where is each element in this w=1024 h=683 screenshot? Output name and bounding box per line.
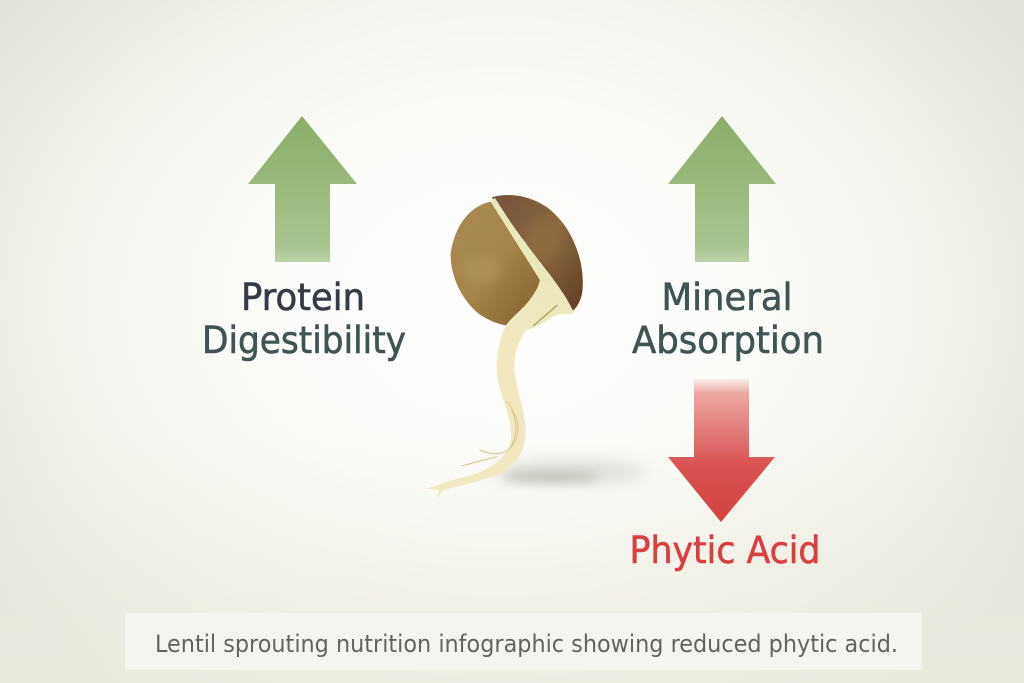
heading: Mineral Absorption: Mineral bbox=[662, 276, 792, 319]
caption panel bbox=[125, 613, 922, 670]
lentil left half bbox=[451, 202, 540, 325]
heading: Mineral Absorption: Absorption bbox=[632, 319, 824, 362]
heading: Protein Digestibility: Digestibility bbox=[202, 319, 406, 362]
lentil right half bbox=[492, 195, 583, 311]
sprout slit bbox=[533, 305, 557, 326]
root hairs bbox=[462, 402, 518, 466]
right half highlight bbox=[525, 220, 562, 260]
heading: Protein Digestibility bbox=[202, 276, 406, 362]
heading: Protein Digestibility: Protein bbox=[241, 276, 365, 319]
heading: Mineral Absorption bbox=[632, 276, 824, 362]
icon: sprouting lentil bbox=[424, 195, 583, 498]
sprout stem and root bbox=[424, 198, 573, 498]
icon: green up arrow, protein digestibility bbox=[248, 116, 357, 262]
icon: green up arrow, mineral absorption bbox=[668, 116, 776, 262]
icon: red down arrow, phytic acid bbox=[668, 379, 775, 522]
sprout shadow bbox=[492, 461, 648, 483]
caption text: Lentil sprouting nutrition infographic showing reduced phytic acid. bbox=[155, 630, 898, 658]
heading: Phytic Acid: Phytic Acid bbox=[630, 529, 820, 572]
left half highlight bbox=[463, 257, 500, 283]
